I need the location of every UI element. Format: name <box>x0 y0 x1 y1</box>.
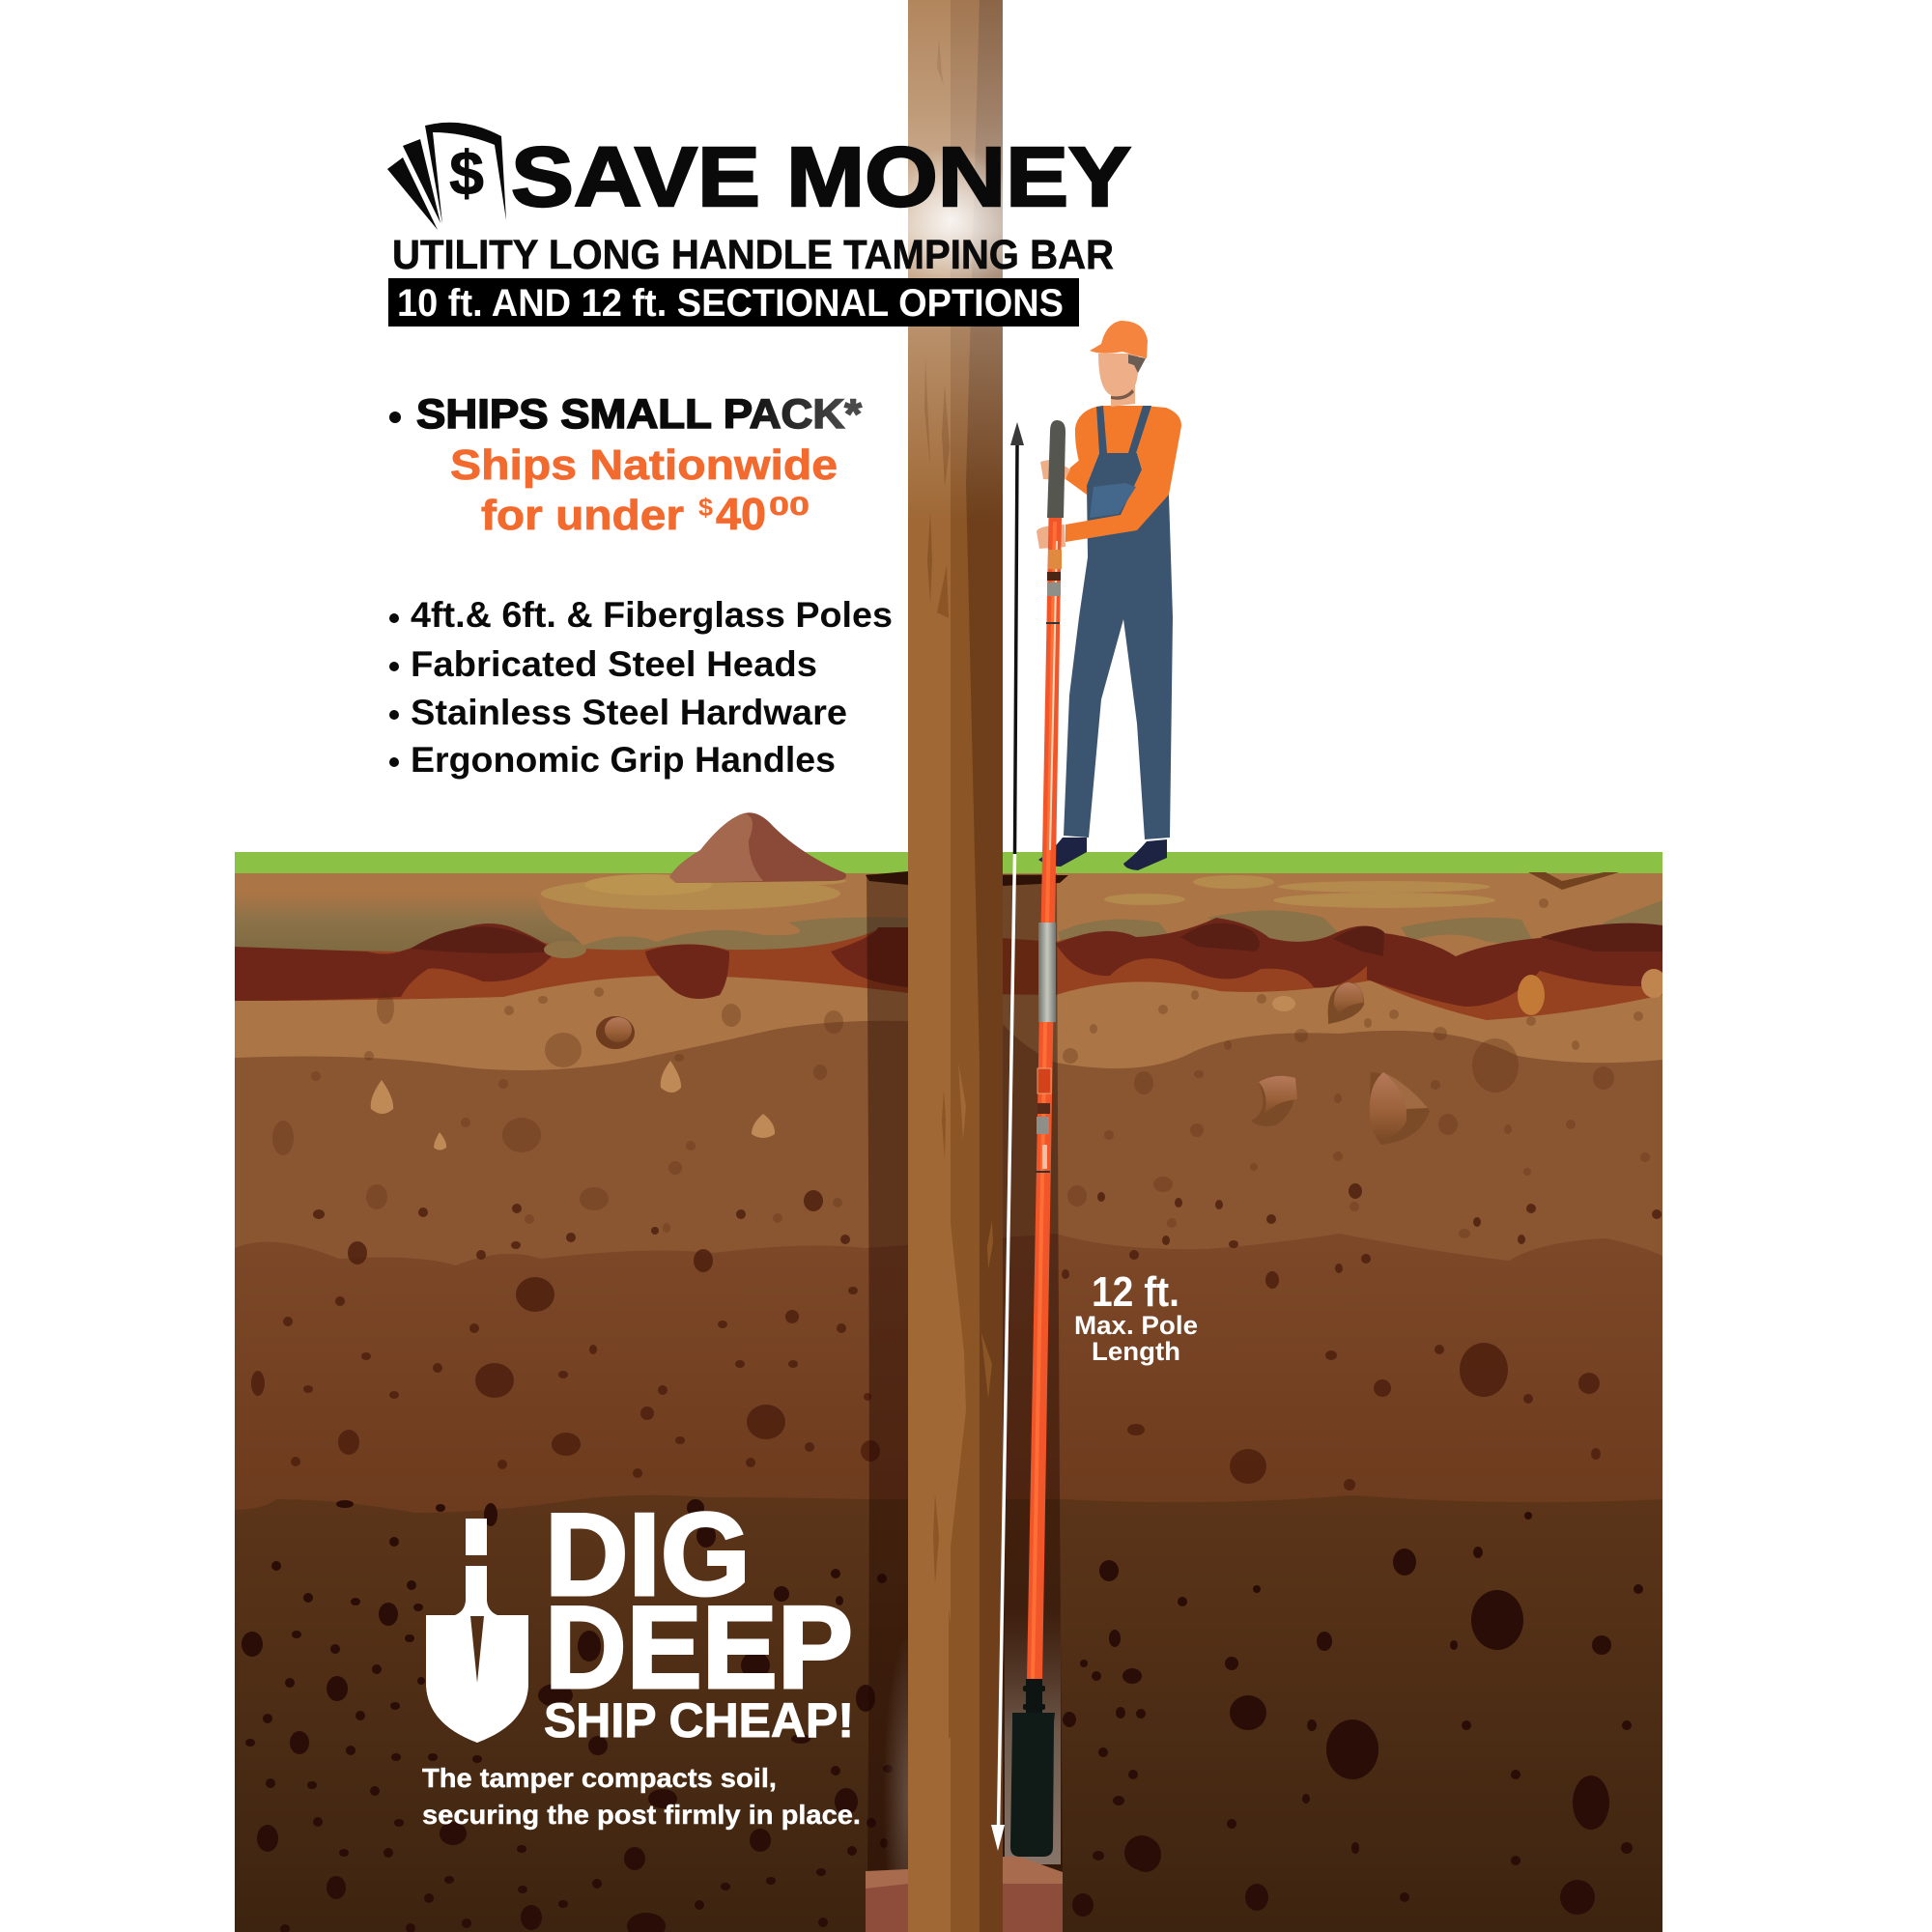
chin shadow <box>1111 389 1134 400</box>
fiberglass pole <box>1027 518 1062 1681</box>
bib pocket <box>1090 483 1136 518</box>
orange-red clay band <box>235 923 1662 1020</box>
rock: right middle <box>1251 1076 1297 1126</box>
ships small pack block: 40 <box>716 489 766 539</box>
hands <box>1037 459 1070 549</box>
light pebbles <box>371 996 1295 1150</box>
deep soil pebbles <box>242 1499 1643 1932</box>
worker <box>1037 321 1181 870</box>
subtitle: UTILITY LONG HANDLE TAMPING BAR <box>392 232 1114 278</box>
depth arrow <box>991 422 1024 1851</box>
tamper caption: The tamper compacts soil, <box>422 1763 777 1793</box>
dig deep headline <box>544 1489 854 1747</box>
dig deep headline: DEEP <box>545 1581 853 1713</box>
overall straps <box>1096 406 1151 453</box>
silver coupling <box>1038 923 1056 1022</box>
ships small pack block: Ships Nationwide <box>450 441 838 489</box>
deep dark soil layer <box>235 1495 1662 1932</box>
post top fade <box>908 0 1003 522</box>
grass notch <box>1528 872 1619 890</box>
dirt pile <box>669 812 846 883</box>
shirt <box>1065 406 1181 542</box>
header: money icon <box>387 123 506 230</box>
backfill soil at bottom of hole <box>866 1857 1063 1932</box>
ships small pack block: 00 <box>769 492 810 521</box>
yellow topsoil patches <box>541 874 1495 910</box>
ships small pack block: for under <box>481 492 684 539</box>
grass strip <box>235 852 1662 875</box>
olive soil band <box>235 900 1662 952</box>
back arm <box>1065 454 1087 495</box>
pole length label: 12 ft. <box>1092 1268 1179 1316</box>
wooden post <box>908 0 1003 1932</box>
dig deep headline: DIG <box>545 1489 751 1620</box>
rock: small left <box>596 1016 635 1049</box>
tamper head glow <box>1005 1604 1061 1864</box>
head <box>1098 354 1138 395</box>
wood grain <box>924 39 993 1739</box>
left trench glow <box>883 1633 937 1932</box>
hair <box>1128 355 1146 373</box>
left trench shadow <box>867 874 908 1871</box>
dig deep headline: SHIP CHEAP! <box>544 1693 854 1747</box>
pole length label <box>1074 1268 1198 1366</box>
soil cross-section <box>235 852 1666 1932</box>
feature list: Stainless Steel Hardware <box>411 693 847 732</box>
overalls <box>1064 453 1173 839</box>
right trench shadow <box>1003 874 1063 1871</box>
title: SAVE MONEY <box>511 130 1131 224</box>
sectional options banner: 10 ft. AND 12 ft. SECTIONAL OPTIONS <box>397 282 1064 325</box>
hard hat <box>1090 321 1148 358</box>
icon: shovel <box>426 1519 528 1743</box>
tamping bar <box>1010 420 1065 1857</box>
darker soil specks <box>251 1183 1662 1491</box>
pole length label: Length <box>1092 1337 1180 1366</box>
feature list <box>389 595 893 780</box>
ships small pack block: SHIPS SMALL PACK* <box>416 391 862 438</box>
dark red clay blobs <box>235 918 1666 1015</box>
tamper caption <box>422 1763 861 1830</box>
sticker upper <box>1046 550 1062 624</box>
tamper blade <box>1010 1713 1055 1857</box>
mid soil layer <box>235 1021 1662 1275</box>
post highlight <box>908 135 1003 299</box>
rock: right large <box>1370 1072 1430 1145</box>
feature list: Ergonomic Grip Handles <box>411 740 836 780</box>
ships small pack block <box>389 391 862 539</box>
topsoil layer <box>235 873 1662 1070</box>
tamper neck <box>1023 1679 1045 1714</box>
grip <box>1047 420 1065 518</box>
neck <box>1111 382 1135 407</box>
brown soil layer <box>235 1234 1662 1517</box>
dollar sign: $ <box>449 138 484 208</box>
sticker lower <box>1036 1068 1051 1173</box>
pole length label: Max. Pole <box>1074 1311 1198 1340</box>
tamper caption: securing the post firmly in place. <box>422 1800 861 1830</box>
ships small pack block: $ <box>698 493 714 522</box>
feature list: 4ft.& 6ft. & Fiberglass Poles <box>411 595 893 635</box>
rock: right upper <box>1328 982 1364 1024</box>
boots <box>1038 838 1167 870</box>
feature list: Fabricated Steel Heads <box>411 644 817 684</box>
soft soil specks <box>272 898 1650 1238</box>
trench rim <box>866 871 1068 886</box>
